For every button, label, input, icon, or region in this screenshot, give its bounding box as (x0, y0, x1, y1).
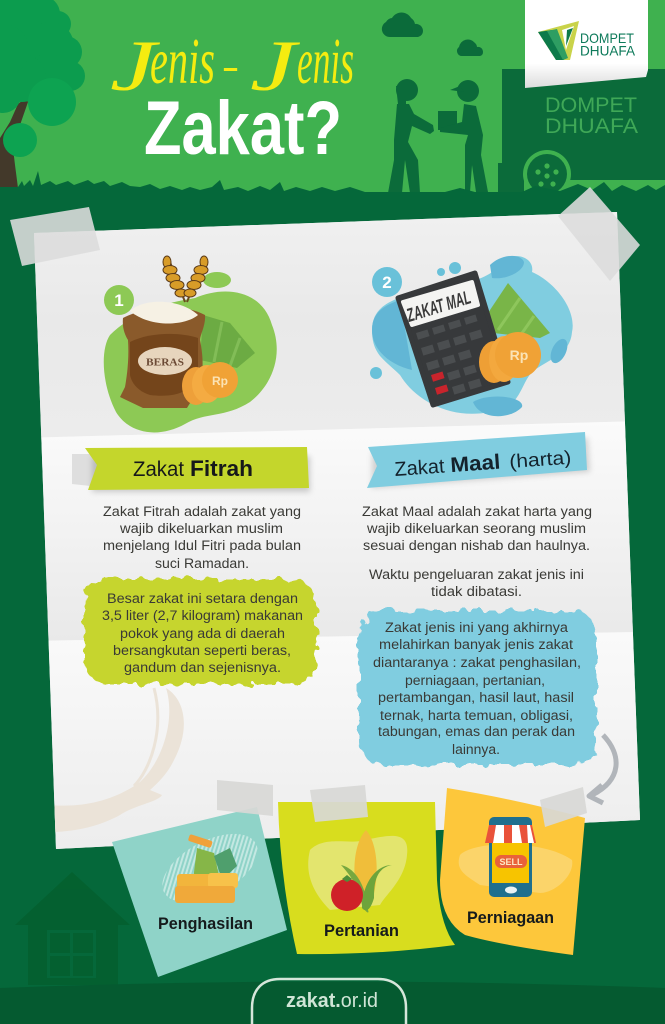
logo wordmark: DHUAFA (580, 42, 636, 58)
banknotes (200, 315, 255, 368)
icon: phone shop (485, 817, 536, 897)
card: Perniagaan: Perniagaan (467, 908, 554, 927)
card: Pertanian: Pertanian (324, 921, 399, 940)
logo mark (538, 21, 579, 60)
title: Jenis-Jenis: - (222, 43, 239, 88)
cloud small (457, 39, 483, 56)
green blob (104, 291, 277, 432)
title: Jenis-Jenis: J (250, 26, 300, 106)
title: Jenis-Jenis: J (110, 26, 160, 106)
ribbon: Zakat Maal: Maal (450, 451, 501, 477)
tape: card two (310, 785, 368, 822)
text: jenis zakat: Zakat jenis ini yang akhirnya (385, 620, 569, 635)
delivery truck: DOMPET (545, 94, 637, 117)
arrow (589, 735, 616, 803)
tape top left (10, 207, 100, 266)
cloud large (382, 13, 423, 37)
coins (479, 332, 541, 383)
pale blob (459, 844, 572, 893)
number badge 2: 2 (382, 273, 392, 292)
banknotes (488, 283, 550, 338)
website badge: zakat.or.id (286, 990, 378, 1012)
text: jenis zakat: lainnya. (452, 742, 500, 757)
title: Jenis-Jenis: enis (150, 25, 215, 98)
coins (182, 362, 238, 405)
delivery truck: DHUAFA (545, 115, 638, 138)
card: Penghasilan: Penghasilan (158, 914, 253, 933)
callout blob: yellow (84, 579, 316, 684)
ribbon: Zakat Maal (367, 432, 590, 488)
title: Jenis-Jenis (110, 25, 354, 106)
text: jenis zakat: pertambangan, hasil laut, hasil (378, 690, 574, 705)
logo wordmark (580, 30, 636, 58)
small blob (203, 272, 231, 288)
text: jenis zakat: perniagaan, pertanian, (405, 673, 545, 688)
text: jenis zakat: tabungan, emas dan perak dan (378, 724, 575, 739)
text: Zakat Maal description: tidak dibatasi. (431, 584, 522, 599)
text: Zakat Maal description: Zakat Maal adalah zakat harta yang (362, 504, 592, 519)
pale blob (308, 836, 407, 910)
paper panel (20, 200, 650, 860)
person giving silhouette (438, 80, 488, 192)
text: Zakat Fitrah description: menjelang Idul Fitri pada bulan (103, 538, 301, 553)
rice sack: BERAS (146, 356, 184, 368)
icon: money and gold (175, 834, 238, 903)
number badge 1: 1 (114, 291, 124, 310)
text: Zakat Maal description: wajib dikeluarkan seorang muslim (366, 521, 586, 536)
icon: phone shop: SELL (499, 857, 523, 867)
card: Pertanian (278, 802, 455, 954)
calculator (398, 273, 508, 405)
text: jenis zakat: melahirkan banyak jenis zakat (379, 637, 573, 652)
text: besar zakat: bersangkutan seperti beras, (113, 643, 291, 658)
delivery truck (498, 69, 665, 198)
logo wordmark: DOMPET (580, 30, 634, 46)
title: Jenis-Jenis: enis (297, 25, 354, 98)
text: Zakat Maal description (362, 504, 592, 599)
hatch blob (151, 820, 269, 916)
title: Zakat?: Zakat? (144, 86, 342, 171)
bottom dark band (0, 982, 665, 1024)
text: besar zakat: pokok yang ada di daerah (120, 626, 285, 641)
small dots (370, 262, 461, 379)
text: besar zakat: 3,5 liter (2,7 kilogram) makanan (102, 608, 303, 623)
text: Zakat Maal description: sesuai dengan nishab dan haulnya. (363, 538, 590, 553)
ribbon: Zakat Fitrah: Fitrah (190, 456, 253, 481)
faint house silhouette (15, 872, 130, 985)
logo card (525, 0, 648, 88)
illustration: Zakat Maal (370, 256, 573, 416)
tree (0, 0, 85, 188)
blue blob (372, 256, 573, 414)
text: Zakat Fitrah description: suci Ramadan. (155, 556, 249, 571)
text: Zakat Fitrah description: Zakat Fitrah adalah zakat yang (103, 504, 301, 519)
text: Zakat Fitrah description (103, 504, 301, 571)
text: besar zakat: Besar zakat ini setara dengan (107, 591, 298, 606)
number badge 2 (372, 267, 402, 297)
coins: Rp (510, 347, 528, 363)
card: Perniagaan (440, 788, 585, 955)
text: Zakat Fitrah description: wajib dikeluarkan muslim (119, 521, 283, 536)
ribbon: Zakat Maal: Zakat (394, 456, 446, 481)
rice sack (120, 302, 205, 408)
text: jenis zakat: ternak, harta temuan, obligasi, (380, 708, 573, 723)
card: Penghasilan (112, 807, 287, 977)
ribbon: Zakat Fitrah: Zakat (133, 458, 184, 481)
background sky (0, 0, 665, 195)
ribbon: Zakat Fitrah (72, 447, 310, 492)
illustration: Zakat Fitrah (104, 256, 277, 432)
text: Zakat Maal description: Waktu pengeluaran zakat jenis ini (369, 567, 584, 582)
text: jenis zakat: diantaranya : zakat penghasilan, (373, 655, 581, 670)
icon: corn and tomato (331, 830, 392, 912)
text: besar zakat: gandum dan sejenisnya. (124, 660, 281, 675)
blue accents (372, 256, 571, 416)
website badge (252, 979, 406, 1024)
tape: card one (217, 780, 273, 816)
wheat (163, 256, 208, 302)
ribbon: Zakat Maal: (harta) (509, 448, 572, 473)
coffee stain (50, 688, 184, 832)
number badge 1 (104, 285, 134, 315)
coins: Rp (212, 374, 228, 388)
text: besar zakat (102, 591, 303, 675)
tape: card three (540, 787, 587, 827)
callout blob: blue (359, 610, 596, 765)
person receiving silhouette (388, 79, 434, 193)
tape top right (558, 187, 640, 281)
text: jenis zakat (373, 620, 581, 757)
calculator: ZAKAT MAL (404, 287, 474, 327)
